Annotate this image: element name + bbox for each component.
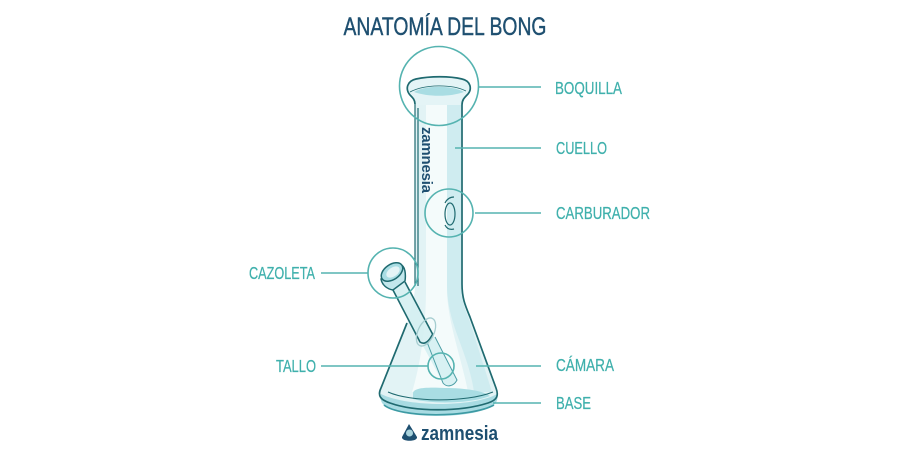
label: camara: CÁMARA bbox=[556, 355, 614, 375]
body outline right bbox=[379, 77, 497, 410]
label: cazoleta: CAZOLETA bbox=[249, 263, 315, 283]
icon: logo mascot bbox=[402, 424, 417, 441]
title: ANATOMÍA DEL BONG bbox=[344, 12, 546, 41]
mouth inner line bbox=[410, 86, 466, 92]
label: boquilla: BOQUILLA bbox=[555, 78, 622, 98]
neck shade bbox=[447, 105, 492, 392]
callout: tallo bbox=[321, 353, 454, 379]
brand on the neck: zamnesia bbox=[418, 127, 435, 194]
label: tallo: TALLO bbox=[276, 356, 316, 376]
callout: cazoleta bbox=[321, 248, 418, 298]
callout: cuello bbox=[455, 147, 541, 149]
bottom inner line bbox=[388, 392, 493, 400]
label: cuello: CUELLO bbox=[556, 138, 607, 158]
glass body fill bbox=[379, 100, 497, 415]
callout: boquilla bbox=[400, 46, 541, 126]
base glass bbox=[381, 394, 497, 416]
callout: camara bbox=[476, 365, 541, 367]
logo: zamnesia bbox=[402, 423, 499, 445]
percolator carburador bbox=[445, 197, 455, 229]
callout: base bbox=[493, 402, 541, 404]
mouth inner bbox=[414, 87, 464, 96]
bong illustration bbox=[378, 77, 497, 416]
label: base: BASE bbox=[556, 393, 591, 413]
stem bbox=[393, 282, 457, 386]
water bbox=[413, 388, 490, 402]
logo wordmark: zamnesia bbox=[421, 423, 499, 445]
label: carburador: CARBURADOR bbox=[556, 203, 650, 223]
neck left lines bbox=[415, 104, 418, 286]
callout: carburador bbox=[425, 189, 541, 237]
mouth lip bbox=[407, 77, 470, 105]
bowl bbox=[378, 259, 406, 290]
base bottom line bbox=[384, 405, 494, 415]
neck highlight bbox=[412, 100, 468, 392]
